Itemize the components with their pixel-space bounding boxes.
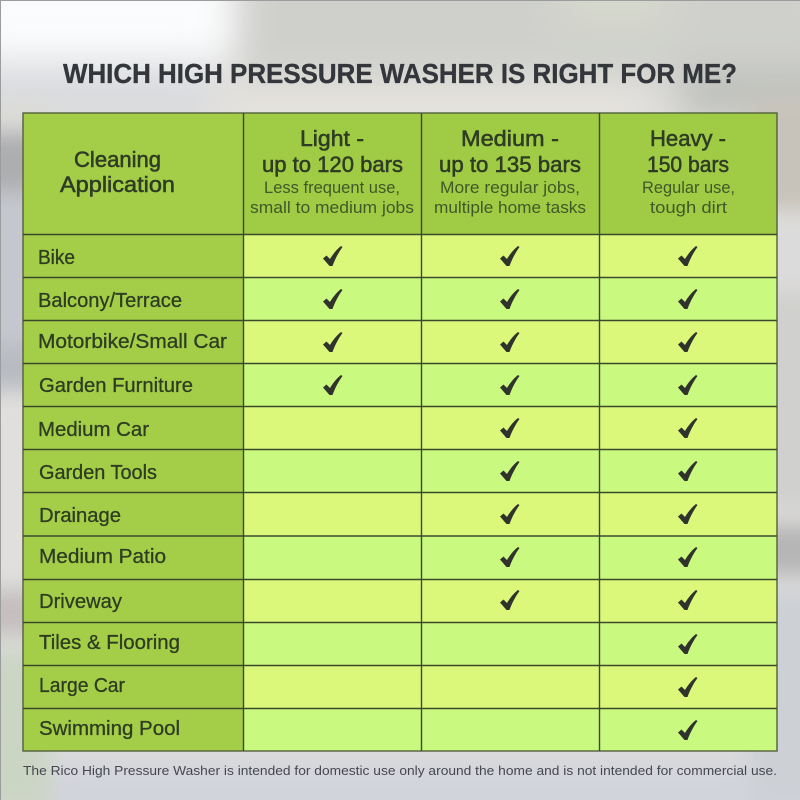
header: heavy: Heavy - (650, 126, 726, 151)
row label: drainage: Drainage (39, 505, 121, 527)
row label: garden tools: Garden Tools (39, 462, 157, 484)
header: light: up to 120 bars (262, 152, 403, 177)
header: light: Light - (300, 126, 364, 151)
header: light (250, 126, 414, 217)
header: heavy: 150 bars (647, 152, 729, 177)
checkmarks: medium column (500, 246, 520, 610)
row label: motorbike/small car: Motorbike/Small Car (38, 331, 227, 353)
header: medium (434, 126, 586, 217)
header: heavy: tough dirt (650, 199, 727, 217)
header: cleaning application: Cleaning (74, 147, 161, 172)
checkmarks: heavy column (678, 246, 698, 740)
row label: driveway: Driveway (39, 591, 122, 613)
title: WHICH HIGH PRESSURE WASHER IS RIGHT FOR ME? (63, 58, 737, 89)
row label: medium car: Medium Car (38, 419, 149, 441)
checkmarks: light column (323, 246, 342, 395)
row label: tiles and flooring: Tiles & Flooring (39, 632, 180, 654)
row label: swimming pool: Swimming Pool (39, 718, 180, 740)
row label: large car: Large Car (39, 675, 125, 697)
row label: bike: Bike (38, 247, 75, 269)
row label: garden furniture: Garden Furniture (39, 375, 193, 397)
comparison table (23, 113, 777, 751)
header: medium: up to 135 bars (439, 152, 581, 177)
row label: medium patio: Medium Patio (39, 546, 166, 568)
first column background (23, 113, 243, 751)
header: light: Less frequent use, (264, 179, 400, 197)
header: medium: multiple home tasks (434, 199, 586, 217)
header: light: small to medium jobs (250, 199, 414, 217)
row label: balcony/terrace: Balcony/Terrace (38, 290, 182, 312)
footnote: The Rico High Pressure Washer is intended for domestic use only around the home and is not intended for commercial use. (23, 763, 777, 778)
header: heavy: Regular use, (642, 179, 735, 197)
header: cleaning application (60, 147, 175, 197)
header row background (243, 113, 777, 234)
header: medium: More regular jobs, (440, 179, 580, 197)
header: medium: Medium - (461, 126, 559, 151)
header: heavy (642, 126, 735, 217)
header: cleaning application: Application (60, 172, 175, 197)
